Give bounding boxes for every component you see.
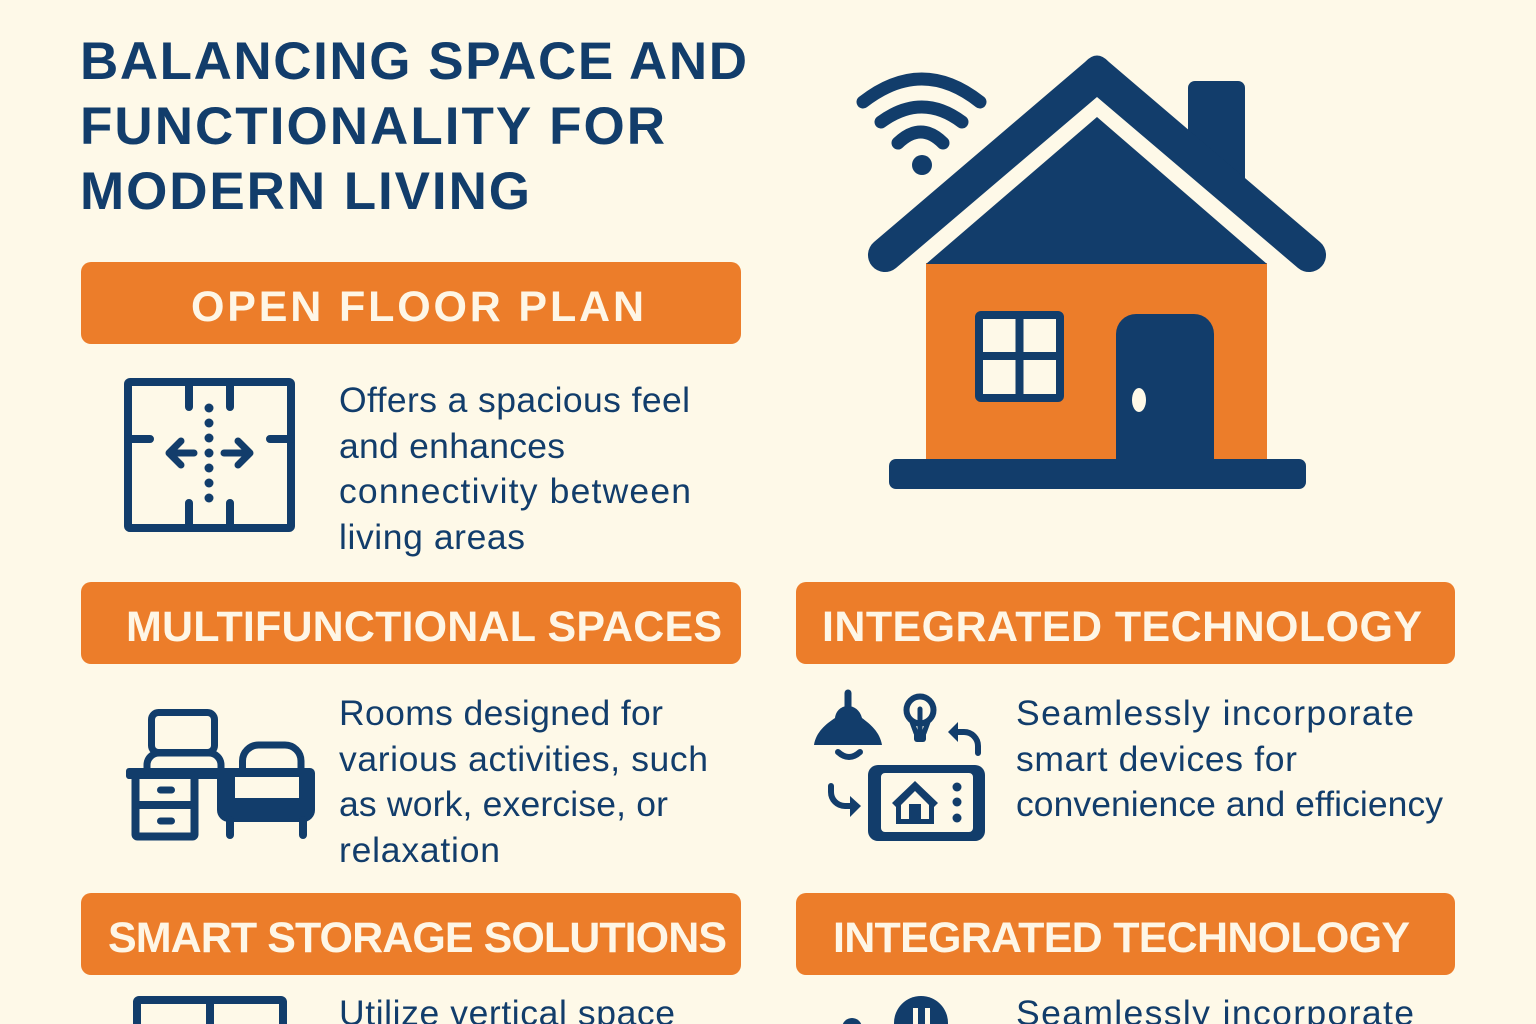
illustration: house with wifi <box>863 56 1326 489</box>
heading bar <box>81 582 741 664</box>
panel: multifunctional spaces <box>81 582 741 870</box>
description: living areas <box>339 517 525 557</box>
description: convenience and efficiency <box>1016 784 1443 824</box>
heading bar: INTEGRATED TECHNOLOGY <box>822 603 1422 651</box>
house door <box>1116 314 1214 465</box>
panel: smart storage solutions <box>81 893 741 1024</box>
icon: partial device <box>842 996 948 1024</box>
heading bar <box>796 582 1455 664</box>
description <box>339 380 691 557</box>
heading bar <box>796 893 1455 975</box>
house base <box>889 459 1306 489</box>
description: Offers a spacious feel <box>339 380 690 420</box>
description <box>339 693 708 870</box>
heading bar: MULTIFUNCTIONAL SPACES <box>126 603 722 651</box>
icon: wifi signal <box>863 79 980 175</box>
house gable <box>926 117 1267 264</box>
description: Rooms designed for <box>339 693 663 733</box>
heading bar: SMART STORAGE SOLUTIONS <box>108 914 727 962</box>
house roof <box>868 56 1326 272</box>
description: as work, exercise, or <box>339 784 668 824</box>
panel: integrated technology <box>796 582 1455 841</box>
heading bar <box>81 893 741 975</box>
title <box>80 32 747 221</box>
description: connectivity between <box>339 471 691 511</box>
icon: smart home devices <box>814 693 985 841</box>
house chimney <box>1188 81 1245 182</box>
title: FUNCTIONALITY FOR <box>80 97 665 156</box>
panel: open floor plan <box>81 262 741 557</box>
icon: floor plan with arrows <box>128 382 291 528</box>
description <box>1016 693 1443 824</box>
icon: desk and bed <box>126 712 315 836</box>
description: and enhances <box>339 426 565 466</box>
title: BALANCING SPACE AND <box>80 32 747 91</box>
heading bar <box>81 262 741 344</box>
title: MODERN LIVING <box>80 162 530 221</box>
panel: integrated technology, second <box>796 893 1455 1024</box>
description: smart devices for <box>1016 739 1297 779</box>
house window <box>979 315 1060 398</box>
heading bar: INTEGRATED TECHNOLOGY <box>833 914 1410 962</box>
description: relaxation <box>339 830 500 870</box>
icon: storage cabinet <box>137 1000 283 1024</box>
description: various activities, such <box>339 739 708 779</box>
description: Seamlessly incorporate <box>1016 693 1414 733</box>
heading bar: OPEN FLOOR PLAN <box>191 283 644 331</box>
house wall <box>926 263 1267 463</box>
